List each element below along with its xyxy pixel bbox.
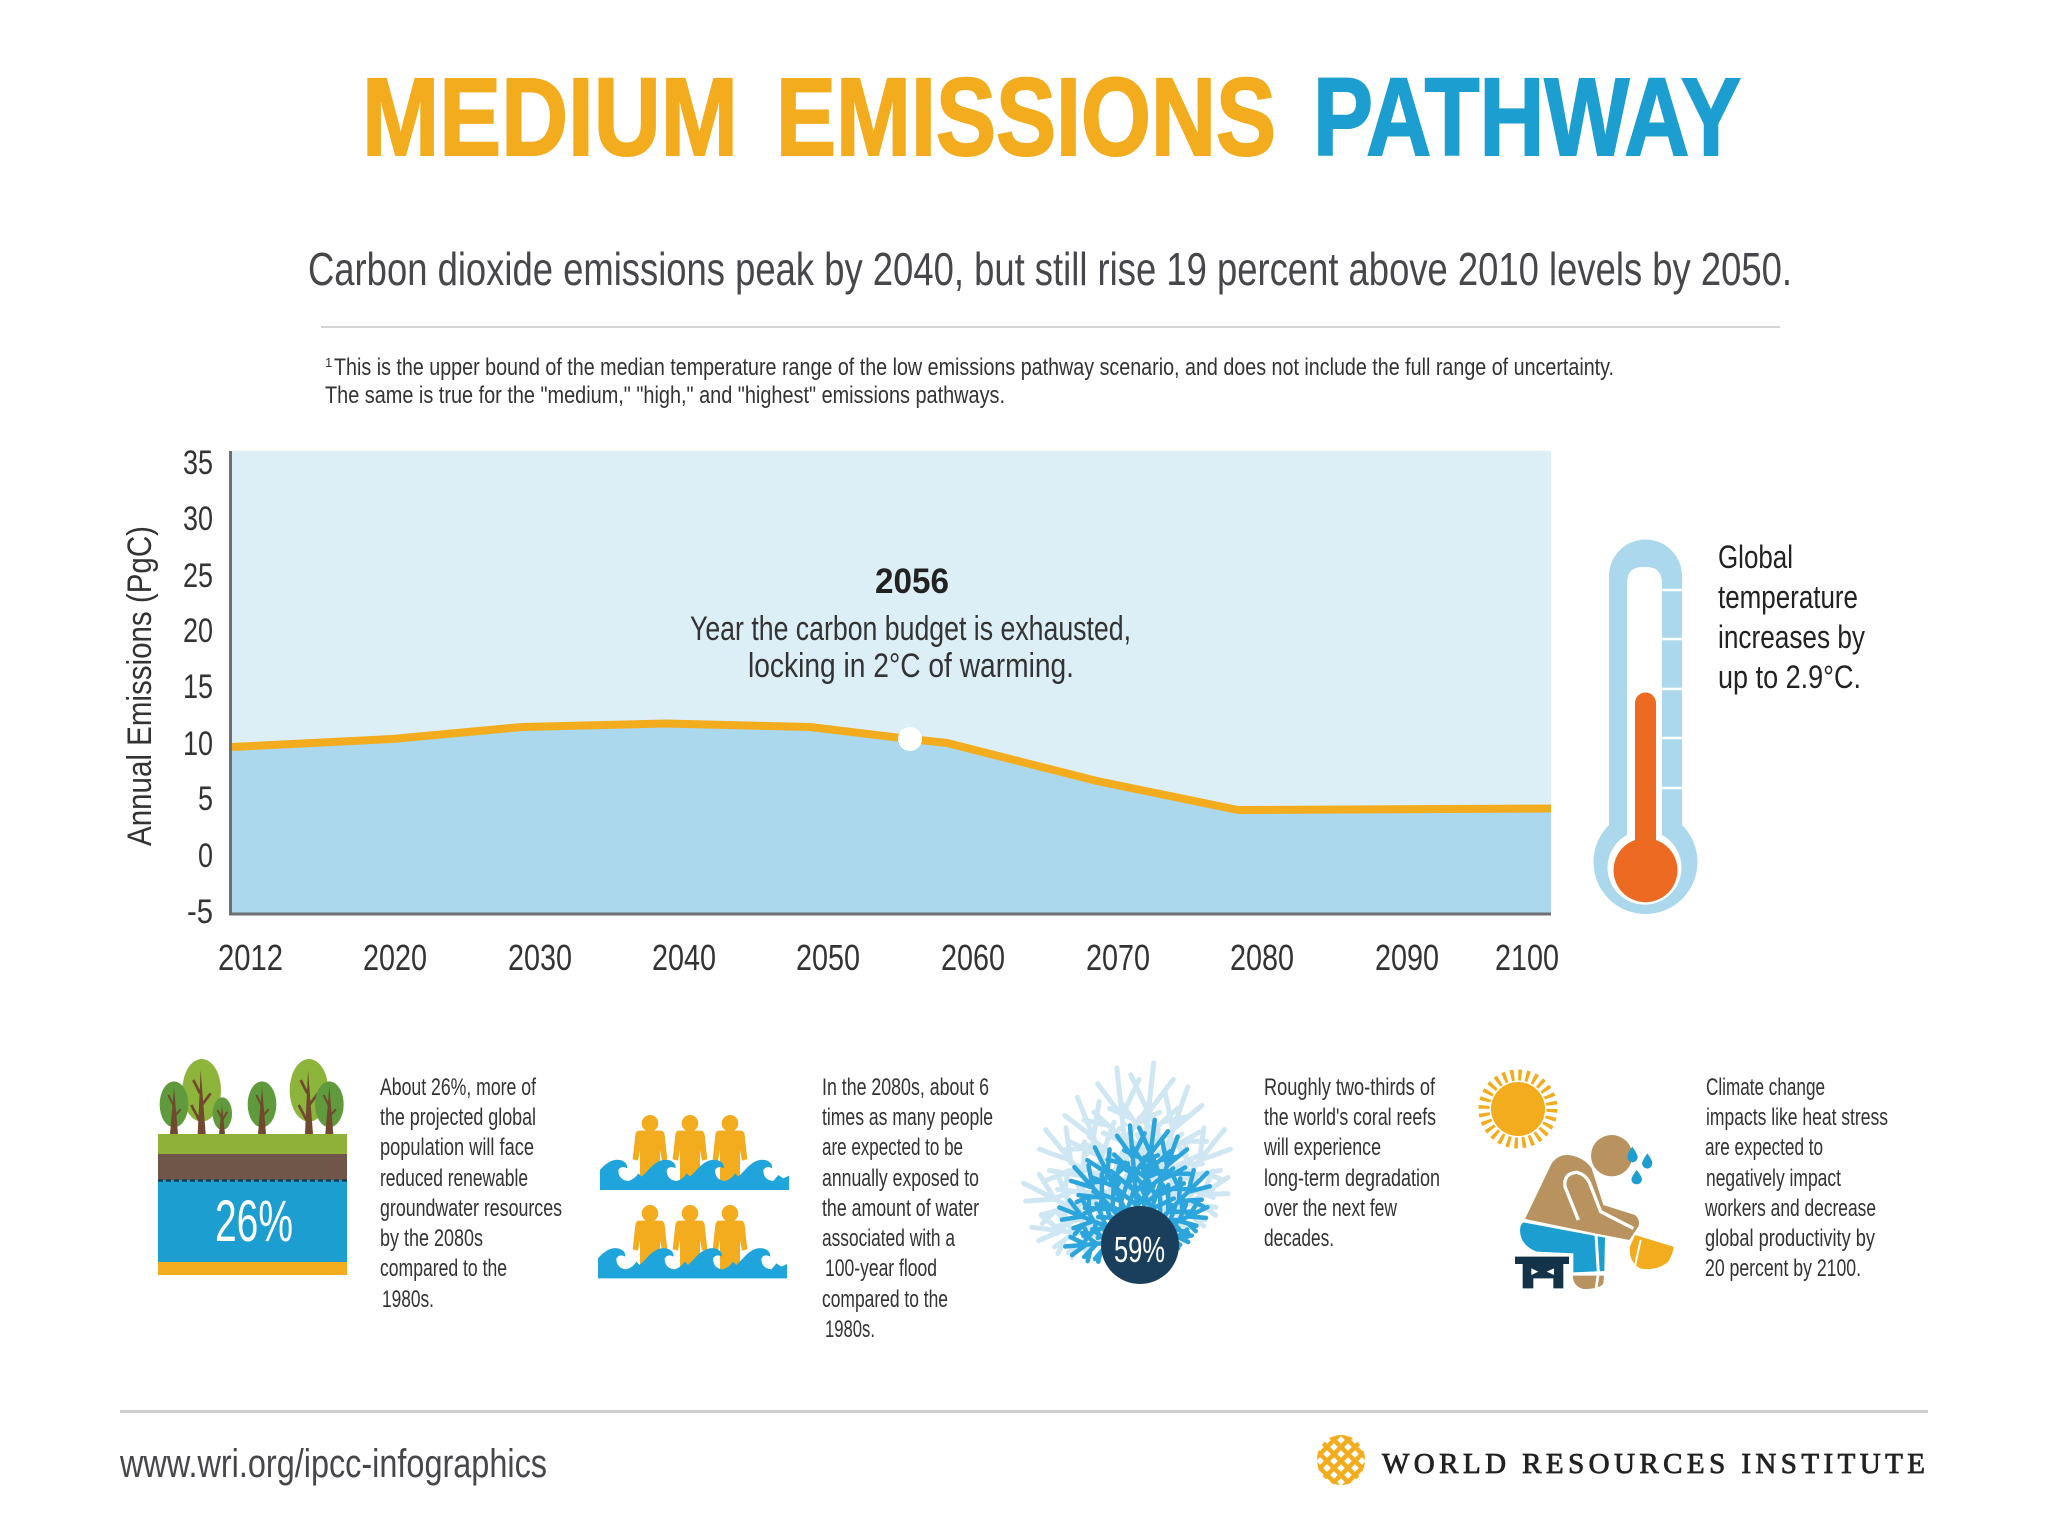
logo: WRI [1317,1435,1924,1485]
text: groundwater: groundwater resources [380,1195,562,1222]
logo mark [1317,1435,1365,1485]
temperature text: increases by [1718,619,1865,655]
annotation: Year the carbon budget is exhausted, [690,610,1131,648]
logo wordmark: WORLD RESOURCES INSTITUTE [1382,1448,1925,1480]
text: flood: In the 2080s, about 6 [822,1074,989,1101]
text: groundwater: reduced renewable [380,1165,528,1192]
text: worker: Climate change [1706,1074,1825,1101]
temperature text: up to 2.9°C. [1718,659,1861,695]
text: coral: decades. [1264,1225,1334,1252]
x axis labels: 2060 [941,937,1005,978]
text: coral [1263,1074,1440,1252]
annotation [690,562,1131,685]
text: flood: the amount of water [822,1195,979,1222]
y axis labels: 15 [183,668,213,706]
sweat drops [1627,1147,1652,1184]
text: worker: global productivity by [1705,1225,1875,1252]
x axis labels: 2090 [1375,937,1439,978]
footnote: This is the upper bound of the median temperature range of the low emissions pathway scenario, and does not include the full range of uncertainty. [334,354,1614,381]
annotation: locking in 2°C of warming. [748,647,1074,685]
emissions line [232,724,1551,810]
text: coral: will experience [1263,1134,1381,1161]
axes [230,451,1551,914]
x axis labels: 2080 [1230,937,1294,978]
text: flood: associated with a [822,1225,955,1252]
x axis labels: 2040 [652,937,716,978]
text: groundwater: by the 2080s [380,1225,483,1252]
head [1591,1135,1632,1176]
text: coral: long-term degradation [1264,1165,1440,1192]
text: flood: compared to the [822,1286,948,1313]
y axis labels: 30 [183,500,213,538]
y axis title: Annual Emissions (PgC) [121,526,159,846]
x axis labels [218,937,1559,978]
icon: sun [1484,1075,1552,1143]
x axis labels: 2020 [363,937,427,978]
26%: 26% [215,1189,293,1254]
icon: thermometer [1594,540,1698,914]
temperature text: Global [1718,539,1793,575]
text: flood: 1980s. [825,1316,875,1343]
y axis labels: 20 [183,612,213,650]
icon: coral [1010,1059,1251,1284]
trousers [1520,1222,1605,1272]
stool [1515,1257,1569,1288]
title: PATHWAY [1313,56,1741,179]
x axis labels: 2030 [508,937,572,978]
text: worker: 20 percent by 2100. [1705,1255,1861,1282]
y axis labels: 0 [198,837,213,875]
torso and arm [1525,1155,1639,1240]
text: groundwater: population will face [380,1134,534,1161]
text: worker: workers and decrease [1704,1195,1876,1222]
y axis labels: 35 [183,444,213,482]
text: coral: Roughly two-thirds of [1264,1074,1435,1101]
x axis labels: 2050 [796,937,860,978]
icon: worker in heat [1515,1135,1673,1289]
y axis labels: 5 [198,780,213,818]
text: flood: are expected to be [822,1134,963,1161]
59% badge [1101,1206,1179,1284]
annotation: 2056 [875,562,949,601]
icon: people in flood [598,1115,789,1278]
temperature text [1718,539,1865,695]
text: flood: times as many people [822,1104,993,1131]
title: EMISSIONS [776,56,1276,179]
title: MEDIUM [362,56,738,179]
plot background [230,451,1551,914]
text: groundwater: compared to the [380,1255,507,1282]
text: groundwater [380,1074,562,1313]
bucket [1630,1235,1673,1269]
footnote: The same is true for the "medium," "high," and "highest" emissions pathways. [325,382,1005,409]
x axis labels: 2100 [1495,937,1559,978]
text: worker: negatively impact [1706,1165,1841,1192]
text: groundwater: About 26%, more of [380,1074,536,1101]
icon: coral: 59% [1114,1229,1165,1270]
text: worker: are expected to [1705,1134,1823,1161]
bleached coral [1010,1059,1251,1267]
emissions area [230,724,1551,914]
text: worker: impacts like heat stress [1706,1104,1888,1131]
footnote [325,354,1614,409]
text: coral: the world's coral reefs [1264,1104,1436,1131]
foot [1573,1276,1604,1289]
marker: 2056 [898,727,922,751]
text: flood: 100-year flood [825,1255,937,1282]
ground layers [158,1134,347,1154]
living coral [1052,1116,1223,1264]
footer url: www.wri.org/ipcc-infographics [119,1442,547,1486]
x axis labels: 2012 [218,937,283,978]
text: coral: over the next few [1264,1195,1397,1222]
chart: annual emissions [121,444,1559,978]
text: flood: annually exposed to [822,1165,979,1192]
y axis labels: 10 [183,725,213,763]
icon: groundwater with trees [158,1059,347,1275]
x axis labels: 2070 [1086,937,1150,978]
text: groundwater: 1980s. [382,1286,434,1313]
y axis labels: -5 [187,893,213,931]
arm outline [1565,1172,1633,1228]
temperature text: temperature [1718,579,1858,615]
y axis labels: 25 [183,557,213,595]
text: groundwater: the projected global [380,1104,536,1131]
footnote: 1 [325,355,332,370]
y axis labels [183,444,213,931]
text: worker [1704,1074,1888,1282]
title [362,56,1741,179]
text: flood [822,1074,993,1343]
trees [160,1059,344,1134]
